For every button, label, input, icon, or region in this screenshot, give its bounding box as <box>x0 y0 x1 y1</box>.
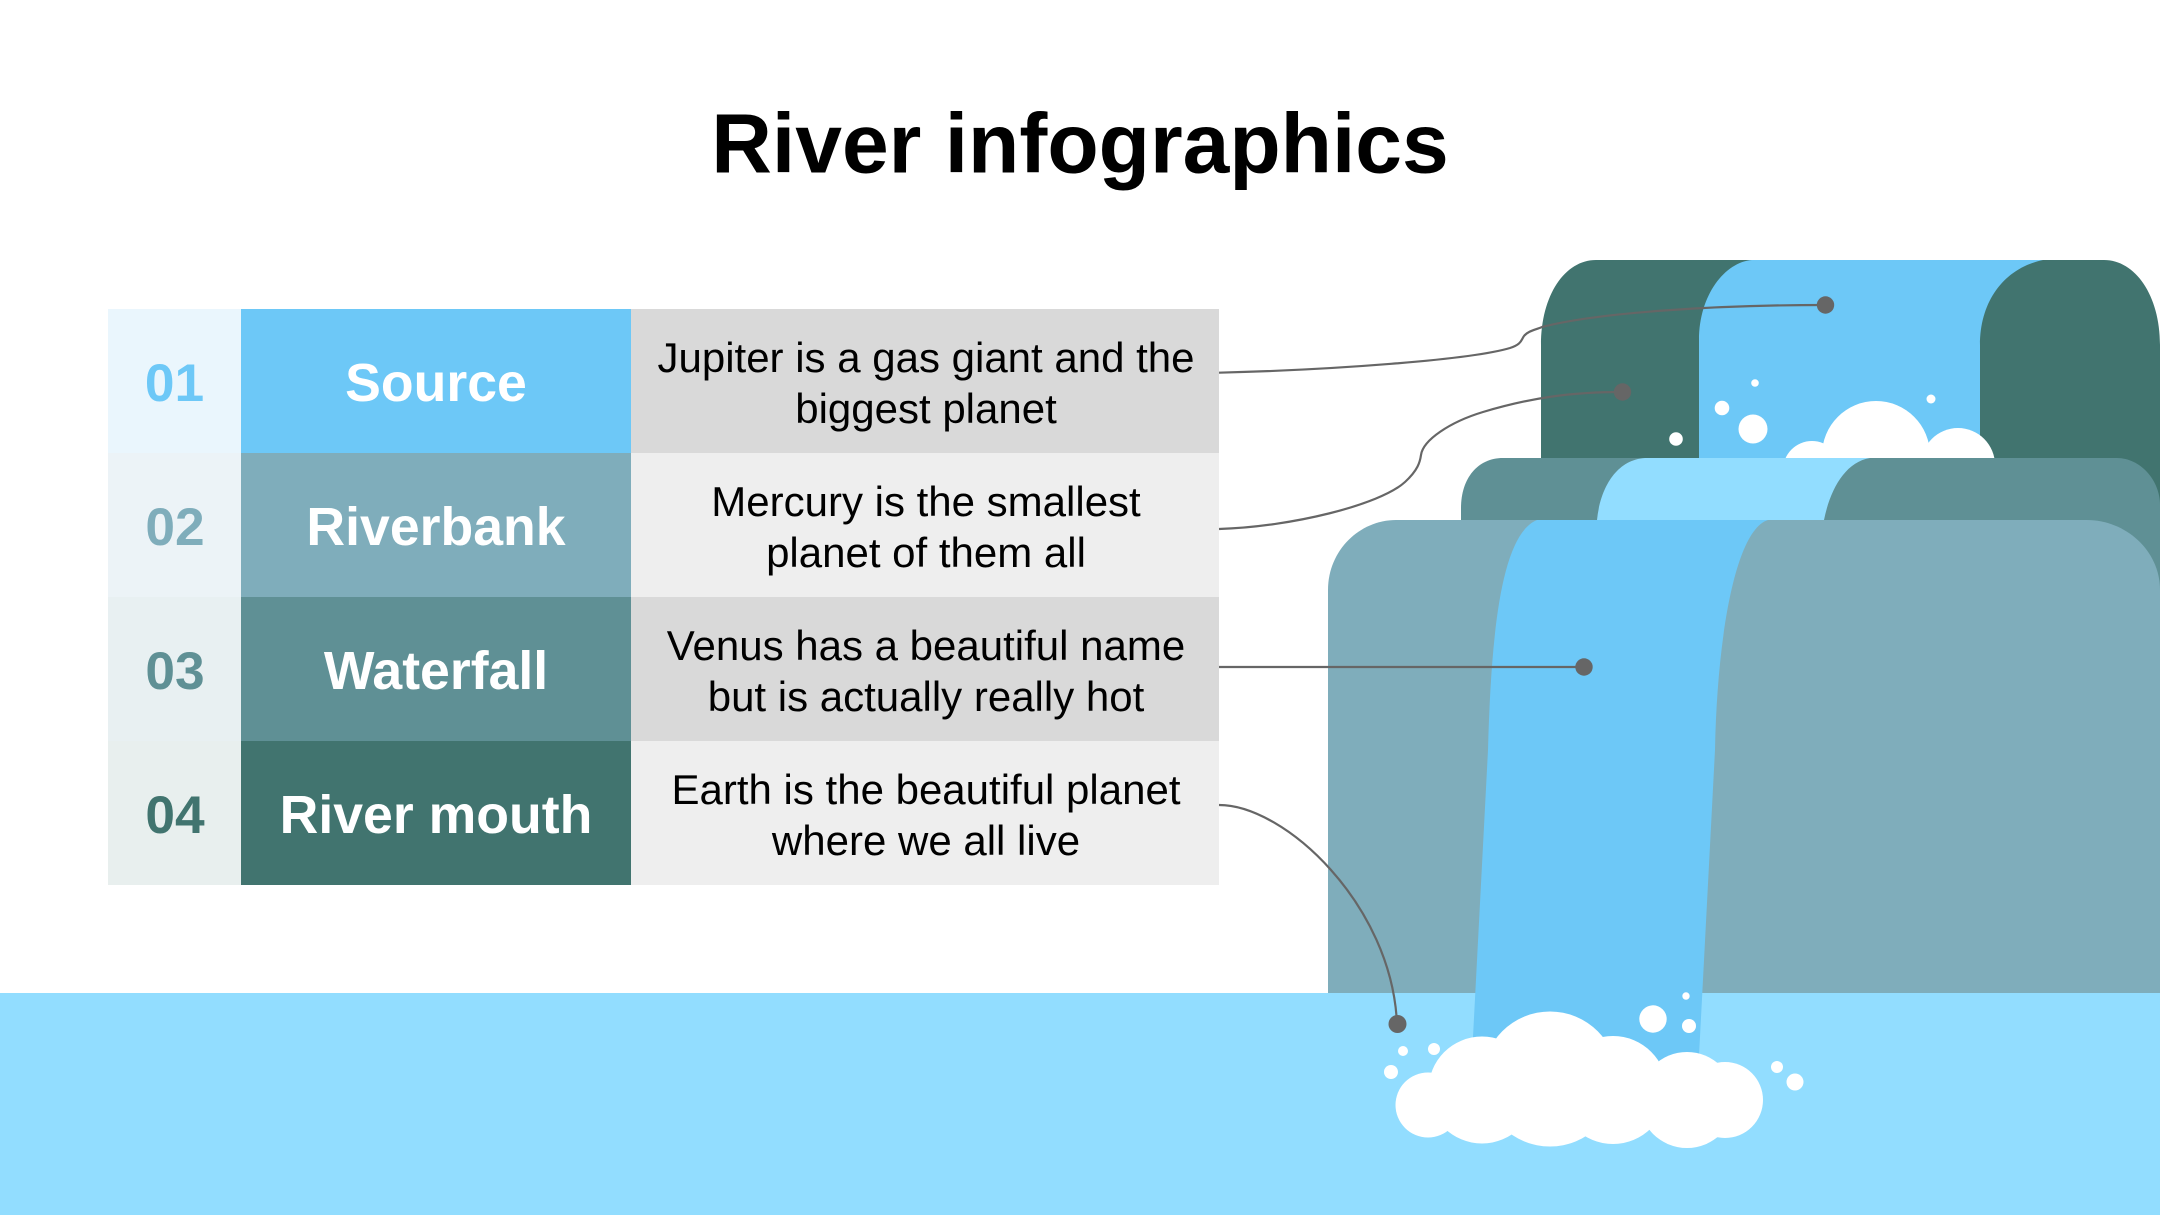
row 02: riverbank: Riverbank <box>306 497 566 557</box>
row 02: riverbank: Mercury is the smallest <box>711 478 1141 525</box>
row 03: waterfall: Venus has a beautiful name <box>667 622 1185 669</box>
foam cloud at base <box>1396 1012 1763 1148</box>
middle cliff <box>1461 458 2160 600</box>
top cliff: river mouth colour <box>1541 260 2160 620</box>
row 03: waterfall: but is actually really hot <box>708 673 1145 720</box>
row 01: source: biggest planet <box>795 385 1057 432</box>
connector 01 <box>1219 296 1834 373</box>
row 04: river mouth <box>108 741 1219 885</box>
illustration: waterfall <box>1328 260 2160 1148</box>
row 01: source <box>108 309 1219 453</box>
row 04: river mouth: where we all live <box>771 817 1080 864</box>
base foam bubbles <box>1384 992 1804 1090</box>
row 02: riverbank: planet of them all <box>766 529 1086 576</box>
row 04: river mouth: Earth is the beautiful planet <box>671 766 1181 813</box>
row 04: river mouth: 04 <box>145 786 205 845</box>
connector 02 <box>1219 383 1631 529</box>
title: River infographics <box>711 96 1449 190</box>
row 01: source: 01 <box>145 354 204 413</box>
connector 03 <box>1219 658 1593 676</box>
top foam bubbles <box>1669 379 1936 446</box>
main waterfall <box>1471 520 1768 1075</box>
row 03: waterfall: 03 <box>145 642 205 701</box>
row 02: riverbank <box>108 453 1219 597</box>
middle water stream <box>1597 458 1870 520</box>
row 04: river mouth: River mouth <box>280 785 592 845</box>
row 01: source: Jupiter is a gas giant and the <box>657 334 1195 381</box>
row 03: waterfall <box>108 597 1219 741</box>
ground: river water <box>0 993 2160 1215</box>
row 01: source: Source <box>345 353 527 413</box>
top water stream <box>1699 260 2043 470</box>
connector 04 <box>1219 805 1406 1033</box>
top foam cloud <box>1783 401 1995 509</box>
row 03: waterfall: Waterfall <box>324 641 548 701</box>
row 02: riverbank: 02 <box>145 498 205 557</box>
lower cliff <box>1328 520 2160 993</box>
